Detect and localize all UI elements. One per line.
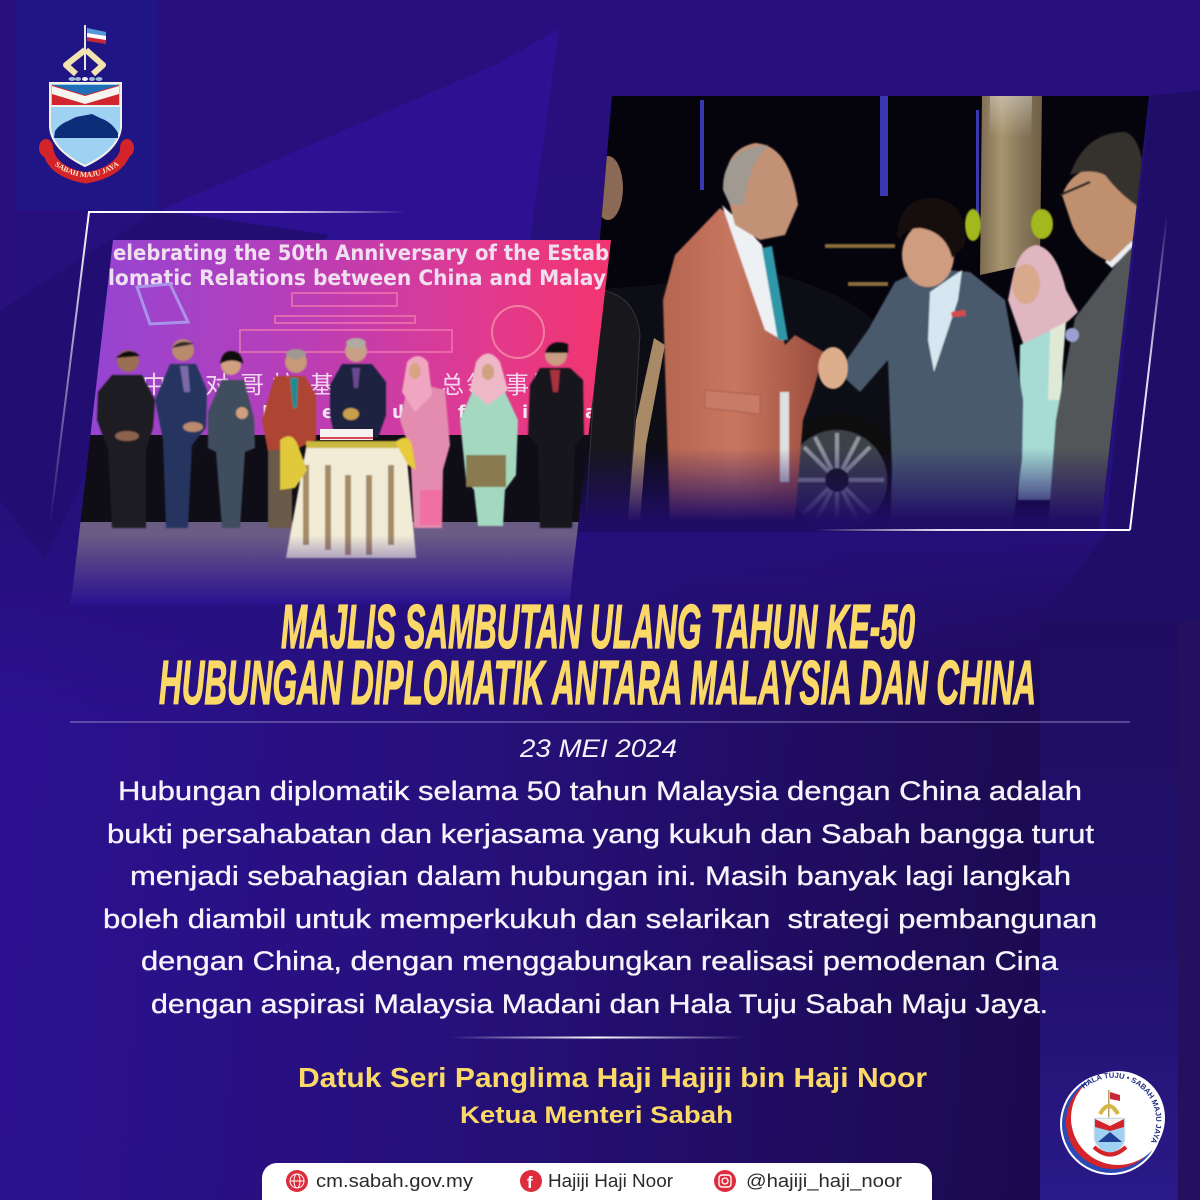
- icon: flag on pole: [84, 25, 106, 70]
- screen heading: [108, 241, 609, 290]
- person 2: [155, 339, 207, 528]
- logo: Sabah coat of arms: [39, 25, 134, 184]
- body text: bukti persahabatan dan kerjasama yang kukuh dan Sabah bangga turut: [107, 819, 1095, 849]
- instagram: @hajiji_haji_noor: [746, 1171, 902, 1192]
- body text: dengan China, dengan menggabungkan realisasi pemodenan Cina: [141, 946, 1059, 976]
- person 7: [460, 354, 518, 526]
- frame: left photo: [50, 211, 405, 525]
- title: [159, 593, 1036, 718]
- badge text: HALA TUJU • SABAH MAJU JAYA: [1081, 1072, 1162, 1142]
- cake table: [280, 436, 416, 558]
- stage base: [60, 435, 620, 523]
- facebook: Hajiji Haji Noor: [548, 1171, 673, 1191]
- man at left edge: [602, 156, 623, 220]
- body text: Hubungan diplomatik selama 50 tahun Malaysia dengan China adalah: [118, 776, 1082, 806]
- bottom fade: [577, 451, 1108, 532]
- icon: mini crest: [1094, 1090, 1126, 1155]
- facebook: f: [527, 1173, 533, 1192]
- screen heading: lomatic Relations between China and Malay: [108, 266, 606, 290]
- cake: [320, 429, 373, 440]
- pillar: [980, 96, 1042, 275]
- man in red jacket: [663, 143, 824, 520]
- icon: motto banner: [39, 139, 134, 184]
- body text: dengan aspirasi Malaysia Madani dan Hala Tuju Sabah Maju Jaya.: [151, 989, 1048, 1019]
- car wheel: [796, 414, 890, 518]
- person 5: [330, 338, 386, 438]
- yellow foliage: [965, 209, 1053, 241]
- screen lower caption fragments: Feulfia: [262, 402, 597, 423]
- screen heading: elebrating the 50th Anniversary of the Estab: [113, 241, 609, 265]
- man in grey suit: [1048, 132, 1144, 530]
- round badge logo: [1060, 1071, 1165, 1175]
- car body: [586, 275, 890, 463]
- person 6: [400, 356, 450, 528]
- icon: raised arms and beads: [66, 50, 103, 81]
- footer contact bar: [262, 1163, 932, 1200]
- photo: left stage: [60, 240, 620, 604]
- bottom fade: [71, 538, 576, 604]
- handshake: [818, 347, 848, 389]
- background lights: [825, 244, 895, 286]
- screen flower motif: [137, 284, 188, 324]
- person 8: [528, 342, 584, 528]
- string lights: [700, 96, 979, 230]
- badge crescent: [1062, 1071, 1165, 1173]
- screen building motif: [240, 293, 452, 352]
- frame: right photo: [815, 215, 1167, 531]
- person 1: [97, 350, 155, 528]
- person 4: [262, 349, 316, 528]
- website: [286, 1170, 473, 1192]
- body text: [103, 776, 1097, 1019]
- instagram: [714, 1170, 902, 1192]
- screen panda motif: [492, 306, 544, 358]
- icon: shield: [50, 83, 121, 166]
- woman in pink hijab: [1008, 245, 1078, 500]
- body text: menjadi sebahagian dalam hubungan ini. Masih banyak lagi langkah: [130, 861, 1071, 891]
- body text: boleh diambil untuk memperkukuh dan selarikan strategi pembangunan: [103, 904, 1097, 934]
- person 3: [208, 351, 255, 528]
- photo: right handshake: [560, 90, 1160, 546]
- speaker role: Ketua Menteri Sabah: [460, 1102, 733, 1129]
- car door: [586, 290, 640, 507]
- speaker name: Datuk Seri Panglima Haji Hajiji bin Haji Noor: [298, 1062, 927, 1093]
- icon: motto banner: SABAH MAJU JAYA: [55, 162, 120, 178]
- woman in blue-grey blazer: [838, 198, 1023, 530]
- screen Chinese text: 中对哥拉基总领事馆: [142, 365, 556, 400]
- website: cm.sabah.gov.my: [316, 1171, 473, 1191]
- date: 23 MEI 2024: [519, 735, 677, 763]
